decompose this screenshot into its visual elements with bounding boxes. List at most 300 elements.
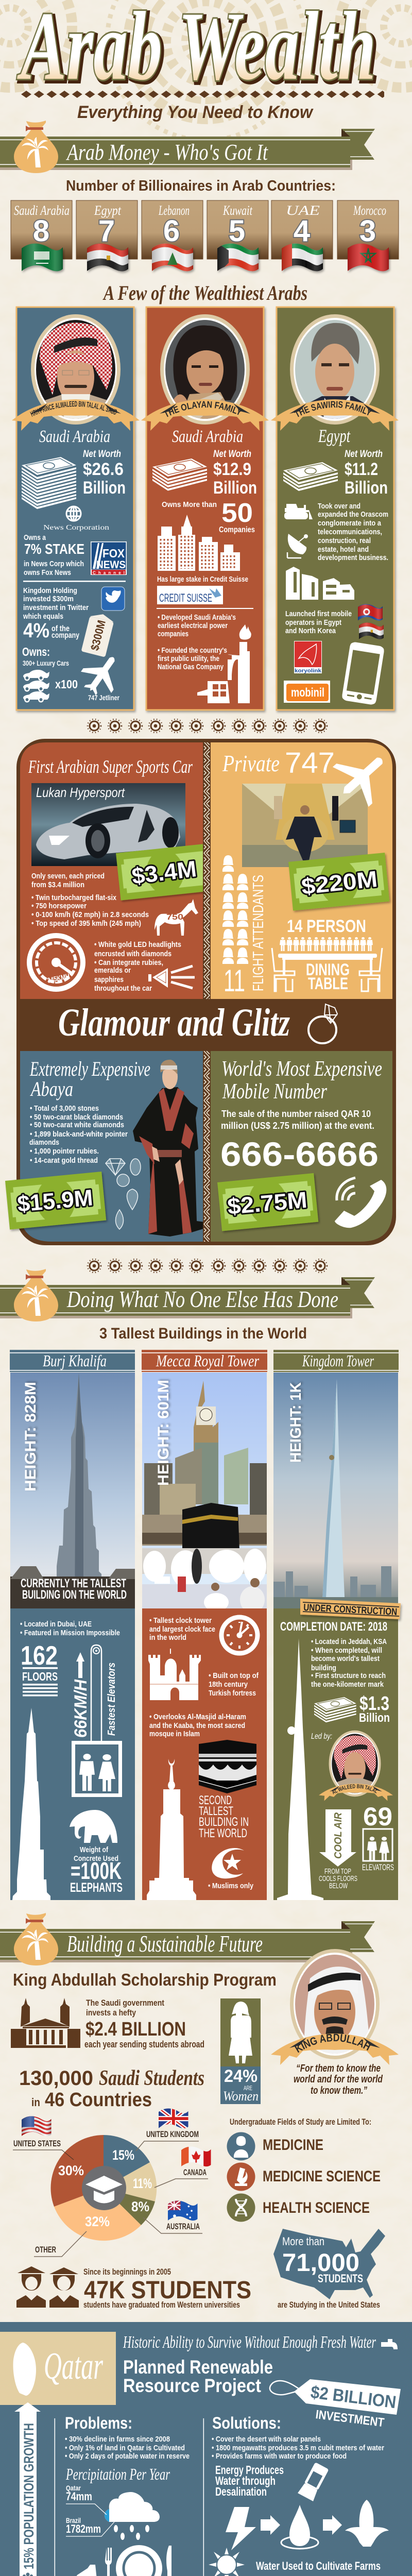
legend: United Kingdom <box>136 2108 199 2151</box>
panel: fields of study <box>227 2117 381 2222</box>
net worth: Net Worth <box>213 449 251 460</box>
text: second tallest: SECOND <box>199 1793 232 1807</box>
stat: 162 floors <box>21 1641 58 1696</box>
map: 71,000 students in USA: STUDENTS <box>318 2272 363 2285</box>
photo: Lykan Hypersport <box>31 783 185 866</box>
heading: project <box>123 2357 273 2396</box>
pie labels: 8% <box>131 2199 149 2214</box>
stat: concrete weight <box>70 1845 123 1895</box>
logo: Fox News: NEWS <box>96 559 126 571</box>
icon: twitter <box>101 587 125 611</box>
stat: 50 companies <box>162 498 255 534</box>
logo: koryolink <box>294 641 322 674</box>
legend: Australia <box>143 2200 202 2233</box>
text: led by: Led by: <box>311 1732 332 1741</box>
fact: 7% stake <box>24 533 84 577</box>
icon: government building <box>11 1998 80 2048</box>
country: Saudi Arabia <box>172 427 243 446</box>
bullets: performance: • Top speed of 395 km/h (245 mph) <box>31 919 141 928</box>
map: 71,000 students in USA <box>273 2229 385 2310</box>
quote: world and for the world <box>294 2074 383 2085</box>
icon: buildings <box>286 567 354 600</box>
arrow: population growth <box>6 2402 49 2576</box>
divider strip <box>203 1051 211 1242</box>
bullets: • Featured in Mission Impossible <box>20 1629 120 1637</box>
icon: speedometer: 345KMH <box>46 972 71 985</box>
bullets: • When completed, will <box>311 1646 382 1655</box>
bullets: fortress: • Built on top of <box>209 1671 259 1680</box>
bullets: kaaba: mosque in Islam <box>149 1730 200 1738</box>
price bill: $2.75M: $2.75M <box>227 1188 308 1219</box>
icon: speedometer <box>29 936 83 989</box>
quote: to know them.” <box>311 2085 367 2096</box>
fact list: utilities: first public utility, the <box>158 654 219 663</box>
bullets: kaaba: • Overlooks Al-Masjid al-Haram <box>149 1713 246 1721</box>
bullets: the one-kilometer mark <box>311 1680 384 1689</box>
bullets: headlights: • White gold LED headlights <box>94 940 181 949</box>
panel: Kingdom Tower <box>273 1350 403 1900</box>
stat: 11 flight attendants: 11 <box>224 963 245 998</box>
net worth: $11.2 <box>345 460 378 479</box>
chart: precipitation cloud: Qatar <box>66 2484 81 2492</box>
stat: 4%: 4% <box>23 619 49 642</box>
fact: Credit Suisse <box>157 575 248 604</box>
logo: mobinil: mobinil <box>291 686 324 700</box>
logo: mobinil <box>284 681 330 703</box>
card: Lebanon: 6 <box>163 214 180 248</box>
card: Saudi Arabia: Saudi Arabia <box>14 203 70 218</box>
logo: koryolink: koryolink <box>295 668 322 674</box>
text: Orascom <box>318 502 388 562</box>
quote: “For them to know the <box>296 2063 381 2074</box>
text: sale <box>221 1109 374 1131</box>
photo: Mecca towers <box>142 1372 267 1613</box>
bullets: kaaba <box>149 1713 246 1738</box>
fact list: utilities <box>158 613 236 671</box>
stat: $2.4 billion: The Saudi government <box>86 1998 164 2008</box>
icon: 747 jet <box>75 647 129 702</box>
stat: elevator speed: 66KM/H <box>71 1679 91 1738</box>
section banner: Arab Money <box>0 121 375 173</box>
header <box>273 1350 399 1372</box>
icon and stat: $1.3 billion <box>314 1693 390 1725</box>
bullets: fortress: 18th century <box>209 1680 248 1689</box>
flags: North Korea and Egypt <box>356 603 385 641</box>
net worth <box>345 449 388 498</box>
panel: private 747 <box>211 739 400 999</box>
bullets: clock: in the world <box>149 1633 186 1642</box>
heading: precipitation: Percipitation Per Year <box>65 2465 170 2483</box>
text: Orascom: development business. <box>318 553 388 562</box>
section banner: Doing What No One Else Has Done <box>0 1269 375 1321</box>
field: medicine science <box>227 2163 381 2191</box>
text: Orascom: telecommunications, <box>318 528 382 536</box>
stat: $2.4 billion: each year sending students abroad <box>84 2039 204 2049</box>
card: UAE: UAE <box>286 203 320 218</box>
text: second tallest: BUILDING IN <box>199 1815 249 1829</box>
card: Saudi Arabia <box>11 200 72 274</box>
photo caption <box>21 1577 127 1602</box>
panel: Olayan family <box>141 306 269 714</box>
heading: scholarship program: King Abdullah Scholarship Program <box>13 1970 277 1989</box>
decorative mandala header pattern <box>0 0 412 140</box>
price tag: $2 billion <box>270 2379 401 2430</box>
chart: precipitation cloud: 1782mm <box>66 2522 101 2535</box>
icons: diamonds <box>106 1159 141 1229</box>
stat: 11 flight attendants <box>224 875 267 998</box>
heading: Glamour and Glitz: Glamour and Glitz <box>58 1001 290 1044</box>
icon: sun and solar panel <box>209 2548 261 2576</box>
fact: 7% stake: owns Fox News <box>24 568 71 577</box>
section banner: Building a Sustainable Future <box>0 1913 375 1965</box>
bullets: performance <box>31 893 149 928</box>
legend: United States: UNITED STATES <box>13 2139 61 2148</box>
icon: price tag $300M <box>81 611 115 657</box>
icon: price tag $300M: $300M <box>88 619 108 652</box>
fact: Credit Suisse: Has large stake in Credit Suisse <box>157 575 248 584</box>
icon: horse 750: 750 <box>166 913 183 922</box>
panel: Qatar <box>0 2322 412 2576</box>
panel: mobile number <box>211 1051 392 1242</box>
stat: 11 flight attendants: FLIGHT ATTENDANTS <box>250 875 267 991</box>
ribbon: name <box>12 399 140 431</box>
bullet: Muslims only: • Muslims only <box>208 1882 254 1890</box>
bullets: stones: • 50 two-carat black diamonds <box>30 1113 123 1122</box>
stat: 24% women: ARE <box>244 2084 252 2092</box>
text: sale: The sale of the number raised QAR 10 <box>221 1109 371 1119</box>
portrait: Prince Alwaleed <box>31 314 121 425</box>
panel: luxury frame <box>5 739 400 1245</box>
text: second tallest: THE WORLD <box>199 1826 247 1840</box>
problems: • Only 2 days of potable water in reserve <box>65 2452 190 2461</box>
pie labels: 15% <box>112 2147 134 2163</box>
bullets: • Located in Dubai, UAE <box>20 1620 92 1629</box>
stat: 4%: company <box>52 631 79 640</box>
stat: 4% <box>23 619 79 642</box>
solutions <box>212 2414 384 2461</box>
divider <box>157 608 253 609</box>
card: Morocco: Morocco <box>353 203 386 218</box>
heading: number of billionaires: Number of Billionaires in Arab Countries: <box>66 178 336 194</box>
bullets: stones: • 14-carat gold thread <box>30 1156 98 1165</box>
portrait: Sawiris <box>290 314 380 425</box>
net worth: $26.6 <box>83 460 124 479</box>
panel: Burj Khalifa <box>10 1350 135 1900</box>
text: cools floors: FROM TOP <box>324 1867 351 1876</box>
bullets: building <box>311 1664 336 1672</box>
text: price: from $3.4 million <box>31 880 84 889</box>
icon: 747 jet: 747 Jetliner <box>88 693 119 702</box>
country box: Qatar <box>0 2332 116 2405</box>
ribbon: Al Waleed bin Talal: AL WALEED BIN TALAL <box>332 1784 377 1794</box>
icon: graduates <box>16 2266 79 2308</box>
text: cools floors: BELOW <box>329 1882 348 1890</box>
text: Orascom: expanded the Orascom <box>318 510 388 519</box>
solutions: • Cover the desert with solar panels <box>212 2435 321 2444</box>
header <box>142 1350 267 1372</box>
stat: 130,000 students in 46 countries: Saudi Students <box>99 2066 204 2090</box>
stat: 14 person table: TABLE <box>308 974 348 993</box>
net worth: Billion <box>83 478 126 498</box>
country: Saudi Arabia <box>39 427 110 446</box>
fact: 7% stake: in News Corp which <box>24 560 84 568</box>
ribbon: King Abdullah <box>271 2033 399 2065</box>
price bill: $15.9M: $15.9M <box>16 1185 94 1217</box>
heading: abaya: Extremely Expensive <box>29 1057 150 1080</box>
text: Orascom: estate, hotel and <box>318 545 369 554</box>
text: second tallest <box>199 1793 249 1840</box>
stat: $2.4 billion: invests a hefty <box>86 2008 136 2018</box>
info block <box>273 1608 398 1900</box>
height label: HEIGHT: 601M <box>155 1380 172 1486</box>
portrait: Olayan <box>160 314 250 425</box>
card: Morocco <box>337 200 399 274</box>
stat: 24% women: Women <box>223 2089 259 2104</box>
stat: concrete weight: Weight of <box>80 1845 109 1854</box>
arrow: cool air <box>319 1809 356 1867</box>
stat: 162 floors: FLOORS <box>22 1670 58 1683</box>
bullets: kaaba: and the Kaaba, the most sacred <box>149 1721 245 1730</box>
text: second tallest: TALLEST <box>199 1804 233 1818</box>
bullets: clock: • Tallest clock tower <box>149 1616 212 1625</box>
legend: Canada <box>154 2146 211 2188</box>
bullets: stones: • Total of 3,000 stones <box>30 1104 99 1113</box>
heading: abaya: Abaya <box>30 1077 73 1100</box>
fact: mobile operators: operators in Egypt <box>285 618 341 627</box>
portrait: Al Waleed <box>329 1731 381 1797</box>
icon: phone handset <box>335 1178 386 1228</box>
fact: twitter investment: Kingdom Holding <box>23 586 77 595</box>
icon: ring <box>308 1004 337 1043</box>
icon: crescent and star <box>212 1848 244 1878</box>
text: Orascom: conglomerate into a <box>318 519 382 528</box>
logo: Fox News: FOX <box>102 547 125 560</box>
bullets: stones: • 1,899 black-and-white pointer <box>30 1130 128 1139</box>
net worth: Net Worth <box>83 449 121 460</box>
fact: 7% stake: 7% STAKE <box>24 541 84 557</box>
field: medicine science: MEDICINE SCIENCE <box>263 2168 381 2185</box>
bullets: clock: and largest clock face <box>149 1625 215 1634</box>
ribbon: Al Waleed bin Talal <box>319 1784 393 1801</box>
card: Egypt <box>76 200 138 274</box>
icon: satellite dish <box>287 534 308 558</box>
fact: twitter investment: investment in Twitter <box>23 603 89 612</box>
solutions: Solutions: <box>212 2414 281 2432</box>
card: Kuwait <box>207 200 268 274</box>
icon: diamond headlight <box>148 966 195 988</box>
icon: city buildings <box>158 515 240 571</box>
legend: Other: OTHER <box>35 2245 56 2255</box>
fact: mobile operators: Launched first mobile <box>285 609 352 618</box>
fact: 7% stake: Owns a <box>24 533 46 542</box>
panel: Mecca Royal Tower <box>142 1350 267 1900</box>
fact: mobile operators: and North Korea <box>285 626 336 635</box>
price bill: $220M: $220M <box>300 867 379 900</box>
country: Egypt <box>318 426 351 446</box>
bullets: headlights: • Can integrate rubies, <box>94 958 163 967</box>
icons: flight attendants <box>222 855 248 964</box>
icon: food imports ship <box>63 2545 198 2576</box>
stat: 50 companies: Owns More than <box>162 500 217 509</box>
card: Lebanon <box>142 200 203 274</box>
stat: $2.4 billion <box>84 1998 204 2049</box>
bullets: headlights: encrusted with diamonds <box>94 950 171 958</box>
divider <box>23 581 126 582</box>
text: cools floors <box>319 1867 357 1890</box>
price bill: $3.4M: $3.4M <box>130 856 198 889</box>
stat: 14 person table: DINING <box>306 960 350 979</box>
bullets: performance: • 0-100 km/h (62 mph) in 2.8 seconds <box>31 910 149 919</box>
photo: jet interior <box>242 784 368 867</box>
problems: • 30% decline in farms since 2008 <box>65 2435 170 2444</box>
legend: United Kingdom: UNITED KINGDOM <box>146 2129 199 2139</box>
net worth: Billion <box>345 478 388 498</box>
text: price <box>31 872 105 889</box>
stat: 47K students: 47K STUDENTS <box>84 2277 251 2304</box>
divider: flowers <box>88 1259 327 1273</box>
legend: Other <box>34 2231 87 2257</box>
heading: project: Resource Project <box>123 2375 261 2396</box>
section banner: Arab Money: Arab Money - Who's Got It <box>66 140 268 165</box>
price bill: $2.75M <box>217 1173 318 1231</box>
arrow: cool air: COOL AIR <box>333 1812 344 1859</box>
icon: cash stack <box>22 457 76 509</box>
icon: plane <box>325 739 400 814</box>
stat: concrete weight: =100K <box>71 1857 122 1884</box>
quote <box>294 2063 383 2096</box>
map: 71,000 students in USA: More than <box>282 2235 324 2248</box>
net worth: Billion <box>213 478 257 498</box>
text: desalination <box>215 2463 284 2498</box>
ribbon: name: HRH PRINCE ALWALEED BIN TALAL AL SAUD <box>30 401 117 417</box>
stat: 50 companies: Companies <box>219 526 255 534</box>
silhouette: Burj Khalifa <box>12 1708 50 1900</box>
text: desalination: Energy Produces <box>215 2463 284 2477</box>
stat: 14 person table <box>272 917 382 993</box>
stat: 162 floors: 162 <box>21 1641 58 1671</box>
country box: Qatar: Qatar <box>44 2345 104 2387</box>
pie labels: 30% <box>58 2163 84 2178</box>
stat: concrete weight: ELEPHANTS <box>70 1880 123 1895</box>
photo caption: Lukan Hypersport <box>36 785 125 800</box>
bullets: • Located in Jeddah, KSA <box>311 1637 387 1646</box>
net worth <box>213 449 257 498</box>
icon: graduation cap <box>85 2176 123 2203</box>
diamond divider <box>21 91 384 98</box>
bullets: fortress: Turkish fortress <box>209 1689 256 1698</box>
text: price: Only seven, each priced <box>31 872 105 880</box>
info block <box>142 1608 267 1900</box>
net worth: Net Worth <box>345 449 383 460</box>
stat: $2.4 billion: $2.4 BILLION <box>85 2019 186 2040</box>
card: Kuwait: Kuwait <box>222 203 253 218</box>
card: UAE: 4 <box>294 214 310 248</box>
stat: concrete weight: Concrete Used <box>74 1854 118 1863</box>
bullets: performance: • 750 horsepower <box>31 902 87 910</box>
bullets: headlights: sapphires <box>94 975 124 984</box>
fact list: utilities: • Founded the country's <box>158 646 227 655</box>
price bill: $15.9M <box>5 1172 106 1230</box>
pie labels <box>58 2147 152 2229</box>
heading: mobile number <box>221 1057 382 1104</box>
problems: • Only 1% of land in Qatar is Cultivated <box>65 2444 185 2452</box>
stat: phone number: 666-6666 <box>220 1135 379 1173</box>
chart: precipitation cloud: Brazil <box>66 2516 81 2524</box>
chart: precipitation cloud: 74mm <box>66 2490 92 2503</box>
bullets: performance: • Twin turbocharged flat-six <box>31 893 117 902</box>
fact list: utilities: earliest electrical power <box>158 621 228 630</box>
field: health science <box>227 2194 370 2222</box>
ribbon: King Abdullah: KING ABDULLAH <box>295 2034 371 2053</box>
icon: elevator <box>73 1645 121 1795</box>
solutions: • 1800 megawatts produces 3.5 m cubit meters of water <box>212 2444 384 2452</box>
fact: twitter investment <box>23 586 89 621</box>
icon: cash stack <box>283 462 338 491</box>
text: cools floors: COOLS FLOORS <box>319 1874 357 1883</box>
stat: 69 elevators: 69 <box>363 1802 392 1831</box>
icon: smartphone <box>342 642 384 704</box>
card: Egypt: Egypt <box>94 203 122 218</box>
stat: 130,000 students in 46 countries: 130,000 <box>19 2067 93 2090</box>
panel: Prince Alwaleed <box>12 306 140 714</box>
icon: bulldozer <box>284 504 313 519</box>
fact list: utilities: • Developed Saudi Arabia's <box>158 613 236 622</box>
bullets: headlights <box>94 940 181 993</box>
section banner: Doing What No One Else Has Done: Doing What No One Else Has Done <box>66 1286 338 1312</box>
icon: cars x100 <box>23 670 78 702</box>
heading: private 747 <box>222 747 335 779</box>
bullets: stones: • 50 two-carat white diamonds <box>30 1121 124 1129</box>
field: medicine <box>227 2132 323 2161</box>
price tag: $2 billion: INVESTMENT <box>315 2408 385 2430</box>
card: Saudi Arabia: 8 <box>33 214 49 248</box>
heading: supercar: First Arabian Super Sports Car <box>28 756 193 777</box>
problems: Problems: <box>65 2414 132 2432</box>
fact: Credit Suisse: CREDIT SUISSE <box>159 591 212 604</box>
stat: 69 elevators <box>362 1802 394 1872</box>
icon: cars x100: x100 <box>55 677 78 691</box>
bullets: stones <box>29 1104 128 1165</box>
field: health science: HEALTH SCIENCE <box>263 2199 370 2216</box>
text: Orascom: construction, real <box>318 536 371 545</box>
header: Kingdom Tower <box>302 1351 374 1370</box>
bullets: clock <box>149 1616 215 1642</box>
legend: United States <box>13 2116 74 2160</box>
portrait: King Abdullah <box>290 1949 380 2059</box>
heading: mobile number: Mobile Number <box>222 1080 328 1104</box>
text: desalination: Water through <box>215 2474 276 2487</box>
text: owns <box>22 645 69 667</box>
silhouette: Mecca tower <box>147 1759 196 1900</box>
card: Egypt: 7 <box>98 214 115 248</box>
heading: private 747: Private <box>222 750 280 776</box>
figure: woman in abaya <box>133 1060 205 1236</box>
height label: HEIGHT: 828M <box>22 1382 39 1492</box>
text: desalination: Desalination <box>215 2485 267 2498</box>
icon: fortress <box>148 1649 201 1700</box>
legend: Australia: AUSTRALIA <box>166 2222 200 2231</box>
stat: 47K students: Since its beginnings in 2005 <box>83 2267 171 2277</box>
heading: private 747: 747 <box>285 747 335 779</box>
logo: Fox News <box>91 541 127 575</box>
photo: Burj Khalifa <box>10 1372 135 1608</box>
text: owns: Owns: <box>22 645 50 658</box>
stat: 4%: of the <box>52 624 70 633</box>
field: medicine: MEDICINE <box>263 2137 323 2154</box>
price bill: $3.4M <box>116 843 214 901</box>
card: Lebanon: Lebanon <box>158 203 190 218</box>
ribbon: name <box>271 399 399 431</box>
